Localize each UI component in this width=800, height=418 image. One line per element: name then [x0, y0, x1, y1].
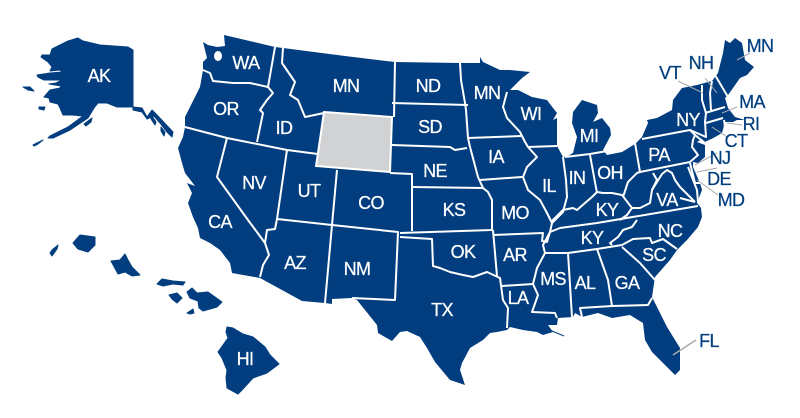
state labels outside map: NH — [689, 53, 713, 73]
state labels inside map: NM — [344, 259, 370, 279]
state labels inside map: NE — [423, 161, 447, 181]
state labels inside map: HI — [237, 349, 253, 369]
Alaska — [23, 38, 173, 146]
state labels inside map: OH — [597, 163, 623, 183]
Wyoming, highlighted grey — [316, 112, 392, 172]
state labels outside map: CT — [725, 131, 748, 151]
state labels inside map: IA — [488, 147, 504, 167]
state labels inside map: NC — [658, 221, 683, 241]
state labels outside map: MD — [718, 190, 745, 210]
state labels inside map: IL — [542, 176, 556, 196]
state labels inside map: MO — [501, 203, 529, 223]
state labels outside map: MN — [747, 36, 773, 56]
state labels inside map: CO — [358, 193, 384, 213]
state labels inside map: PA — [648, 145, 670, 165]
Hawaii — [50, 235, 279, 394]
state labels inside map: SD — [418, 117, 442, 137]
state labels inside map: IN — [569, 168, 585, 188]
state labels inside map: NY — [676, 110, 700, 130]
state labels inside map: UT — [298, 181, 321, 201]
state labels inside map: ND — [416, 76, 441, 96]
state labels outside map — [659, 36, 773, 351]
Puget Sound — [214, 51, 222, 61]
state labels inside map: OK — [451, 242, 476, 262]
state labels inside map — [88, 53, 700, 369]
state labels inside map: SC — [642, 245, 666, 265]
state labels inside map: MS — [540, 269, 566, 289]
state labels inside map: TX — [431, 300, 453, 320]
state labels inside map: MN — [333, 76, 359, 96]
state labels outside map: DE — [707, 169, 731, 189]
state labels inside map: VA — [656, 190, 678, 210]
state labels inside map: WA — [232, 53, 260, 73]
state labels inside map: WI — [521, 104, 541, 124]
state labels inside map: KY — [596, 200, 619, 220]
Louisiana delta stub — [552, 331, 564, 336]
state labels outside map: VT — [659, 63, 681, 83]
state labels inside map: KS — [443, 200, 466, 220]
state labels inside map: AR — [503, 245, 527, 265]
state labels inside map: AZ — [284, 253, 306, 273]
state labels inside map: MN — [474, 83, 500, 103]
state labels inside map: LA — [508, 288, 529, 308]
leader lines — [673, 53, 750, 355]
state labels inside map: ID — [276, 118, 293, 138]
state labels inside map: OR — [213, 99, 239, 119]
state labels outside map: NJ — [710, 148, 730, 168]
state labels inside map: NV — [242, 173, 266, 193]
contiguous states landmass — [178, 35, 754, 385]
state labels inside map: AL — [575, 273, 596, 293]
state labels inside map: CA — [208, 212, 232, 232]
state labels inside map: AK — [88, 66, 111, 86]
state borders — [185, 47, 728, 328]
state labels inside map: KY — [581, 228, 604, 248]
state labels outside map: RI — [743, 114, 759, 134]
state labels outside map: FL — [699, 331, 719, 351]
state labels outside map: MA — [739, 92, 765, 112]
state labels inside map: GA — [615, 273, 640, 293]
state labels inside map: MI — [580, 126, 598, 146]
